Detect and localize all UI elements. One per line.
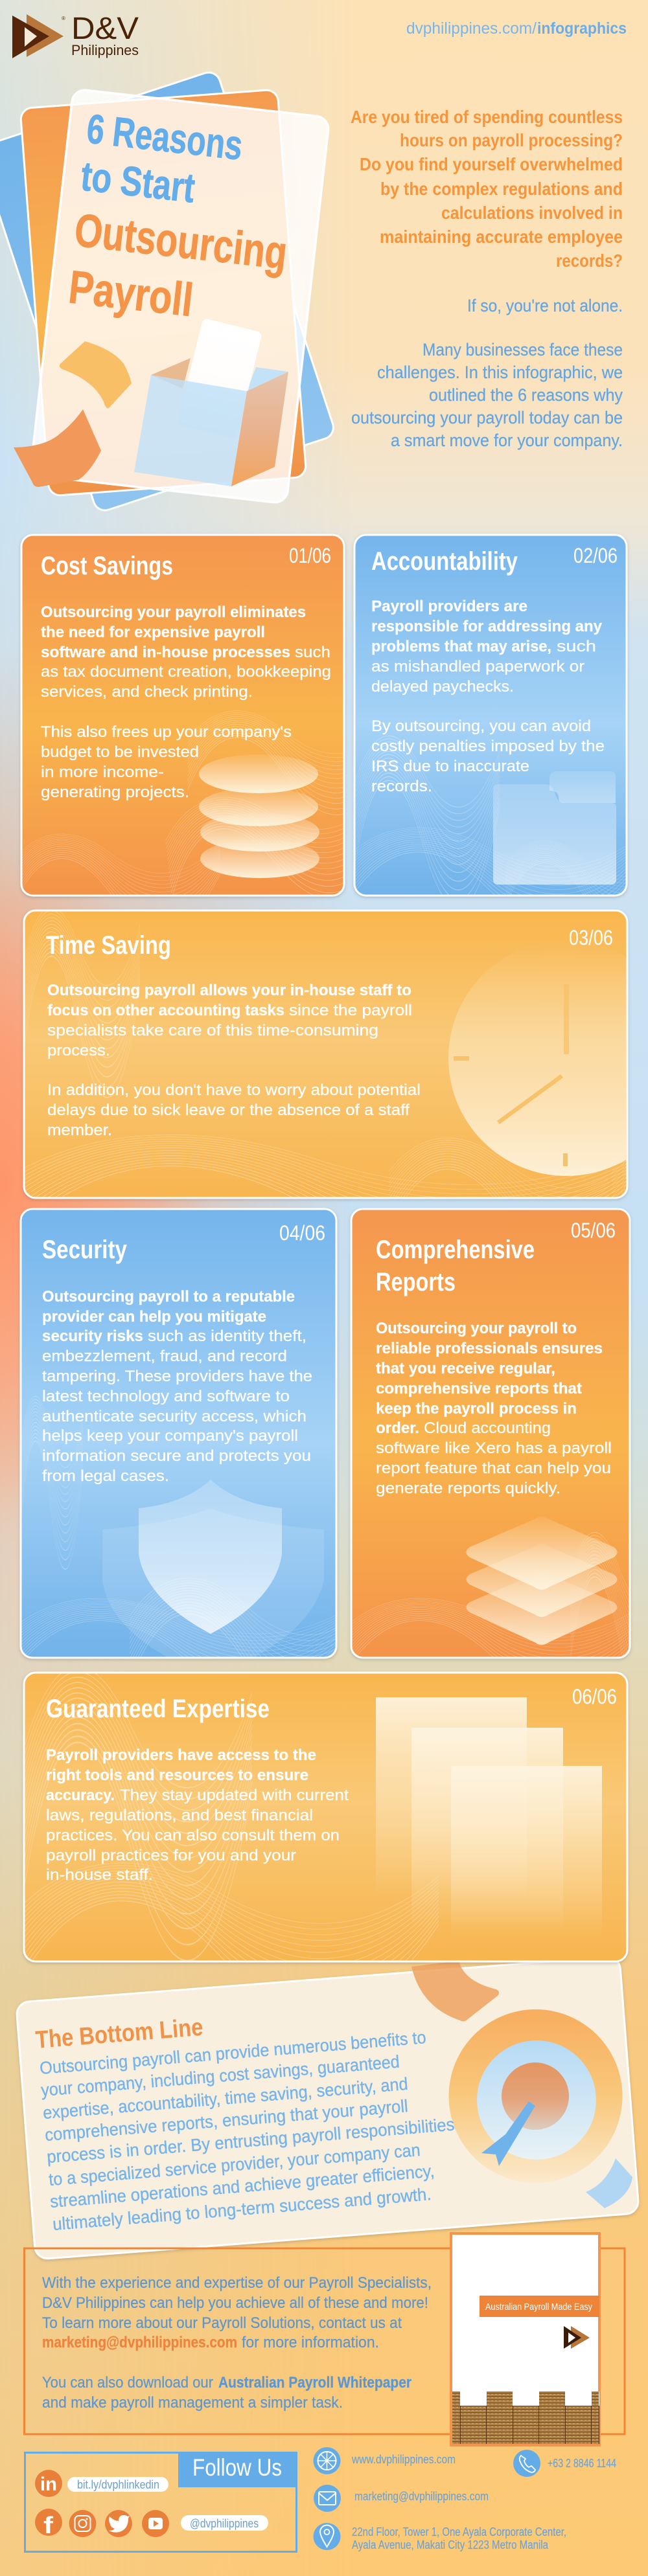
logo: D&V Philippines: Philippines: [71, 42, 139, 58]
icon: linkedin: in: [40, 2474, 57, 2495]
linkedin link pill: bit.ly/dvphlinkedin: [77, 2478, 159, 2491]
body text: costly penalties imposed by the: [371, 738, 605, 755]
follow us heading: [178, 2452, 297, 2487]
cover title band: Australian Payroll Made Easy: [485, 2301, 592, 2312]
call to action text: for more information.: [242, 2334, 379, 2351]
icon: stacked documents: [376, 1697, 602, 1938]
intro: questions: by the complex regulations and: [380, 179, 623, 199]
contact: address: Ayala Avenue, Makati City 1223 Metro Manila: [352, 2538, 549, 2551]
title: 6 Reasons to Start: to Start: [78, 152, 197, 212]
step number: 01/06: [289, 544, 331, 567]
hero illustration: stacked cards with title: [0, 69, 336, 514]
panel: guaranteed expertise: [24, 1667, 627, 2010]
call to action text: Australian Payroll Whitepaper: [218, 2374, 411, 2391]
icon: stacked layers: [467, 1517, 617, 1645]
icon: globe: [314, 2447, 341, 2474]
body text: In addition, you don't have to worry about potential: [47, 1081, 421, 1099]
handle pill: @dvphilippines: [190, 2517, 259, 2530]
logo: D&V Philippines: D&V: [71, 12, 139, 46]
icon: folder: [493, 771, 616, 885]
body text: Outsourcing your payroll eliminates: [41, 604, 306, 621]
body text: provider can help you mitigate: [42, 1308, 266, 1326]
body text: streamline operations and achieve greater efficiency,: [49, 2161, 435, 2211]
body text: in more income-: [41, 763, 164, 781]
icon: linkedin: [35, 2470, 62, 2497]
intro: reassurance text: outlined the 6 reasons why: [429, 385, 623, 405]
body text: security risks: [42, 1328, 143, 1345]
middle orange card: [20, 89, 307, 496]
body text: They stay updated with current: [120, 1787, 349, 1804]
body text: Outsourcing payroll allows your in-house staff to: [47, 982, 411, 999]
step number: 03/06: [569, 926, 613, 949]
body text: keep the payroll process in: [376, 1400, 577, 1418]
icon: facebook: f: [43, 2512, 54, 2538]
title: Outsourcing Payroll: [66, 204, 290, 326]
body text: order.: [376, 1419, 419, 1437]
title: 6 Reasons to Start: [78, 105, 245, 212]
body text: problems that may arise,: [371, 638, 551, 655]
body text: records.: [371, 778, 432, 795]
body text: to a specialized service provider, your company can: [48, 2140, 421, 2189]
shape: blue leaf: [586, 2158, 632, 2208]
website url: infographics: [537, 19, 627, 38]
heading: The Bottom Line: [34, 2014, 204, 2054]
body text: [47, 982, 421, 1139]
body text: [376, 1320, 612, 1497]
body text: practices. You can also consult them on: [46, 1827, 340, 1844]
body text: By outsourcing, you can avoid: [371, 717, 591, 735]
call to action text: marketing@dvphilippines.com: [42, 2334, 237, 2351]
icon: clock: [448, 957, 627, 1176]
contact: email: marketing@dvphilippines.com: [354, 2490, 489, 2503]
body text: focus on other accounting tasks: [47, 1002, 284, 1019]
body text: laws, regulations, and best financial: [46, 1807, 313, 1824]
icon: instagram: [69, 2510, 96, 2537]
body text: reliable professionals ensures: [376, 1340, 603, 1357]
body text: services, and check printing.: [41, 683, 253, 701]
panel: the bottom line: [16, 1956, 639, 2259]
title: Outsourcing Payroll: Outsourcing: [72, 204, 290, 280]
website url: dvphilippines.com/: [406, 19, 537, 38]
body text: Payroll providers are: [371, 598, 527, 615]
intro: reassurance text: If so, you're not alone.: [467, 296, 623, 315]
intro: questions: calculations involved in: [441, 203, 623, 223]
body text: tampering. These providers have the: [42, 1368, 312, 1385]
intro: questions: hours on payroll processing?: [400, 130, 623, 150]
frame: [25, 2248, 625, 2434]
panel: follow us: [25, 2452, 297, 2551]
heading: Security: [42, 1236, 128, 1264]
body text: process is in order. By entrusting payroll responsibilities: [46, 2114, 455, 2167]
icon: twitter: [105, 2510, 132, 2537]
intro: questions: maintaining accurate employee: [380, 227, 623, 247]
body text: budget to be invested: [41, 743, 199, 761]
body text: payroll practices for you and your: [46, 1847, 296, 1864]
logo: D&V Philippines: ®: [62, 16, 65, 21]
body text: [46, 1746, 349, 1884]
intro: questions: [351, 107, 623, 271]
body text: report feature that can help you: [376, 1460, 611, 1477]
cover coins: [452, 2391, 599, 2444]
body text: helps keep your company's payroll: [42, 1427, 298, 1445]
body text: as mishandled paperwork or: [371, 658, 584, 675]
panel: comprehensive reports: [349, 1208, 632, 1662]
body text: IRS due to inaccurate: [371, 758, 529, 775]
title: Outsourcing Payroll: Payroll: [66, 261, 196, 326]
shape: orange leaf: [14, 409, 101, 487]
body text: in-house staff.: [46, 1866, 153, 1884]
step number: 02/06: [573, 544, 618, 567]
body text: Outsourcing payroll can provide numerous benefits to: [39, 2028, 427, 2078]
body text: ultimately leading to long-term success and growth.: [52, 2184, 432, 2234]
body text: since the payroll: [289, 1002, 412, 1019]
panel: security: [21, 1209, 378, 1717]
panel: cost savings: [19, 534, 346, 899]
logo: D&V Philippines: [12, 12, 139, 58]
body text: responsible for addressing any: [371, 618, 603, 635]
body text: that you receive regular,: [376, 1360, 555, 1377]
icon: map pin: [314, 2523, 341, 2550]
body text: [41, 604, 331, 801]
call to action text: and make payroll management a simpler task.: [42, 2394, 343, 2412]
intro: reassurance text: Many businesses face these: [422, 340, 623, 359]
body text: software like Xero has a payroll: [376, 1440, 612, 1457]
step number: 05/06: [571, 1219, 616, 1242]
contact: phone: [513, 2450, 616, 2477]
icon: shield: [102, 1480, 324, 1656]
heading: Time Saving: [46, 931, 171, 960]
heading: Cost Savings: [41, 552, 173, 580]
call to action text: [42, 2274, 432, 2412]
body text: from legal cases.: [42, 1467, 169, 1485]
body text: the need for expensive payroll: [41, 624, 265, 641]
body text: Outsourcing your payroll to: [376, 1320, 577, 1337]
icon: open box with paper: [134, 318, 288, 486]
intro: reassurance text: challenges. In this infographic, we: [377, 363, 623, 382]
card background: [16, 1956, 639, 2259]
shape: yellow leaf: [60, 341, 132, 409]
intro: reassurance text: [351, 296, 623, 450]
cover logo: [564, 2326, 590, 2349]
call to action text: With the experience and expertise of our Payroll Specialists,: [42, 2274, 432, 2292]
body text: comprehensive reports, ensuring that your payroll: [44, 2096, 409, 2145]
body text: authenticate security access, which: [42, 1408, 307, 1425]
contact: address: [314, 2523, 566, 2551]
intro: questions: Do you find yourself overwhelmed: [360, 154, 623, 174]
heading: Guaranteed Expertise: [46, 1695, 270, 1723]
body text: Payroll providers have access to the: [46, 1746, 316, 1764]
body text: Cloud accounting: [424, 1419, 551, 1437]
body text: expertise, accountability, time saving, security, and: [42, 2074, 409, 2123]
body text: as tax document creation, bookkeeping: [41, 663, 331, 681]
contact: email: [314, 2485, 489, 2512]
heading: Comprehensive: [376, 1236, 535, 1264]
body text: your company, including cost savings, guaranteed: [40, 2052, 400, 2100]
whitepaper cover: [451, 2233, 599, 2445]
body text: accuracy.: [46, 1787, 115, 1804]
intro: reassurance text: a smart move for your company.: [391, 431, 623, 450]
icon: youtube: [142, 2510, 169, 2537]
heading: Reports: [376, 1268, 456, 1296]
body text: member.: [47, 1122, 112, 1139]
body text: generate reports quickly.: [376, 1480, 561, 1497]
step number: 06/06: [572, 1685, 617, 1708]
body text: such: [557, 638, 596, 655]
body text: information secure and protects you: [42, 1447, 311, 1465]
icon: facebook: [35, 2509, 62, 2538]
body text: such: [295, 644, 330, 661]
body text: [42, 1288, 312, 1485]
body text: software and in-house processes: [41, 644, 290, 661]
icon: phone: [513, 2450, 540, 2477]
cover title band: [480, 2296, 599, 2317]
icon: target with arrow: [448, 2009, 622, 2183]
icon: envelope: [314, 2485, 341, 2512]
step number: 04/06: [279, 1221, 325, 1245]
panel: time saving: [22, 909, 630, 1202]
intro: reassurance text: outsourcing your payroll today can be: [351, 408, 623, 427]
contact: website: [314, 2447, 456, 2474]
body text: delays due to sick leave or the absence of a staff: [47, 1102, 410, 1119]
panel: call to action: [25, 2233, 625, 2445]
body text: embezzlement, fraud, and record: [42, 1348, 287, 1365]
body text: delayed paychecks.: [371, 678, 514, 695]
follow us heading: Follow Us: [192, 2454, 282, 2481]
body text: process.: [47, 1042, 110, 1059]
heading: Accountability: [371, 547, 518, 576]
body text: [371, 598, 605, 795]
body text: [39, 2028, 455, 2234]
contact: website: www.dvphilippines.com: [351, 2453, 456, 2466]
body text: specialists take care of this time-consuming: [47, 1022, 378, 1039]
body text: This also frees up your company's: [41, 723, 292, 741]
heading: [376, 1236, 535, 1296]
body text: comprehensive reports that: [376, 1380, 582, 1397]
body text: Outsourcing payroll to a reputable: [42, 1288, 295, 1305]
website url: [406, 19, 627, 38]
contact: phone: +63 2 8846 1144: [548, 2457, 616, 2470]
front frosted card: [30, 89, 330, 504]
shape: orange leaf: [411, 1961, 499, 2022]
body text: generating projects.: [41, 784, 189, 801]
back blue card: [0, 69, 336, 514]
icon: coin stack: [199, 754, 319, 878]
body text: right tools and resources to ensure: [46, 1767, 308, 1784]
contact: address: 22nd Floor, Tower 1, One Ayala Corporate Center,: [352, 2525, 566, 2538]
call to action text: To learn more about our Payroll Solutions, contact us at: [42, 2314, 402, 2332]
title: 6 Reasons to Start: 6 Reasons: [84, 105, 245, 169]
body text: such as identity theft,: [148, 1328, 307, 1345]
panel: accountability: [353, 534, 629, 899]
call to action text: You can also download our: [42, 2374, 213, 2391]
intro: questions: records?: [556, 251, 623, 271]
body text: latest technology and software to: [42, 1388, 290, 1405]
call to action text: D&V Philippines can help you achieve all of these and more!: [42, 2294, 428, 2312]
